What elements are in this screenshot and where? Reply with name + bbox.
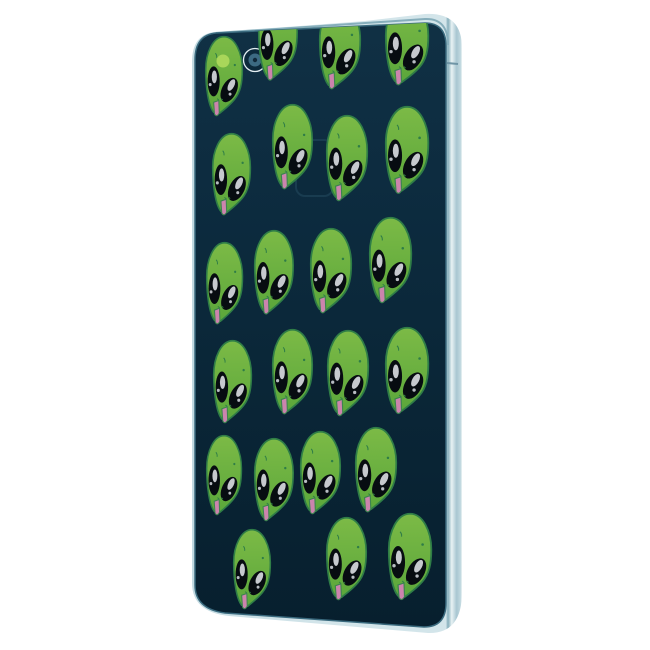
alien row 6 <box>234 514 431 609</box>
alien row 4 <box>214 328 428 423</box>
alien row 3 <box>207 218 411 324</box>
frame top rim <box>216 19 448 45</box>
alien row 5 <box>207 428 396 521</box>
phone case product illustration <box>192 14 462 633</box>
alien pattern <box>206 0 431 609</box>
camera flash <box>216 54 230 68</box>
fingerprint sensor <box>296 140 333 196</box>
alien row 2 <box>213 105 428 215</box>
camera lens <box>244 48 266 72</box>
alien row 1 <box>204 23 430 116</box>
phone back panel <box>195 23 446 627</box>
frame side button line <box>447 63 458 64</box>
case outer frame <box>192 14 462 633</box>
